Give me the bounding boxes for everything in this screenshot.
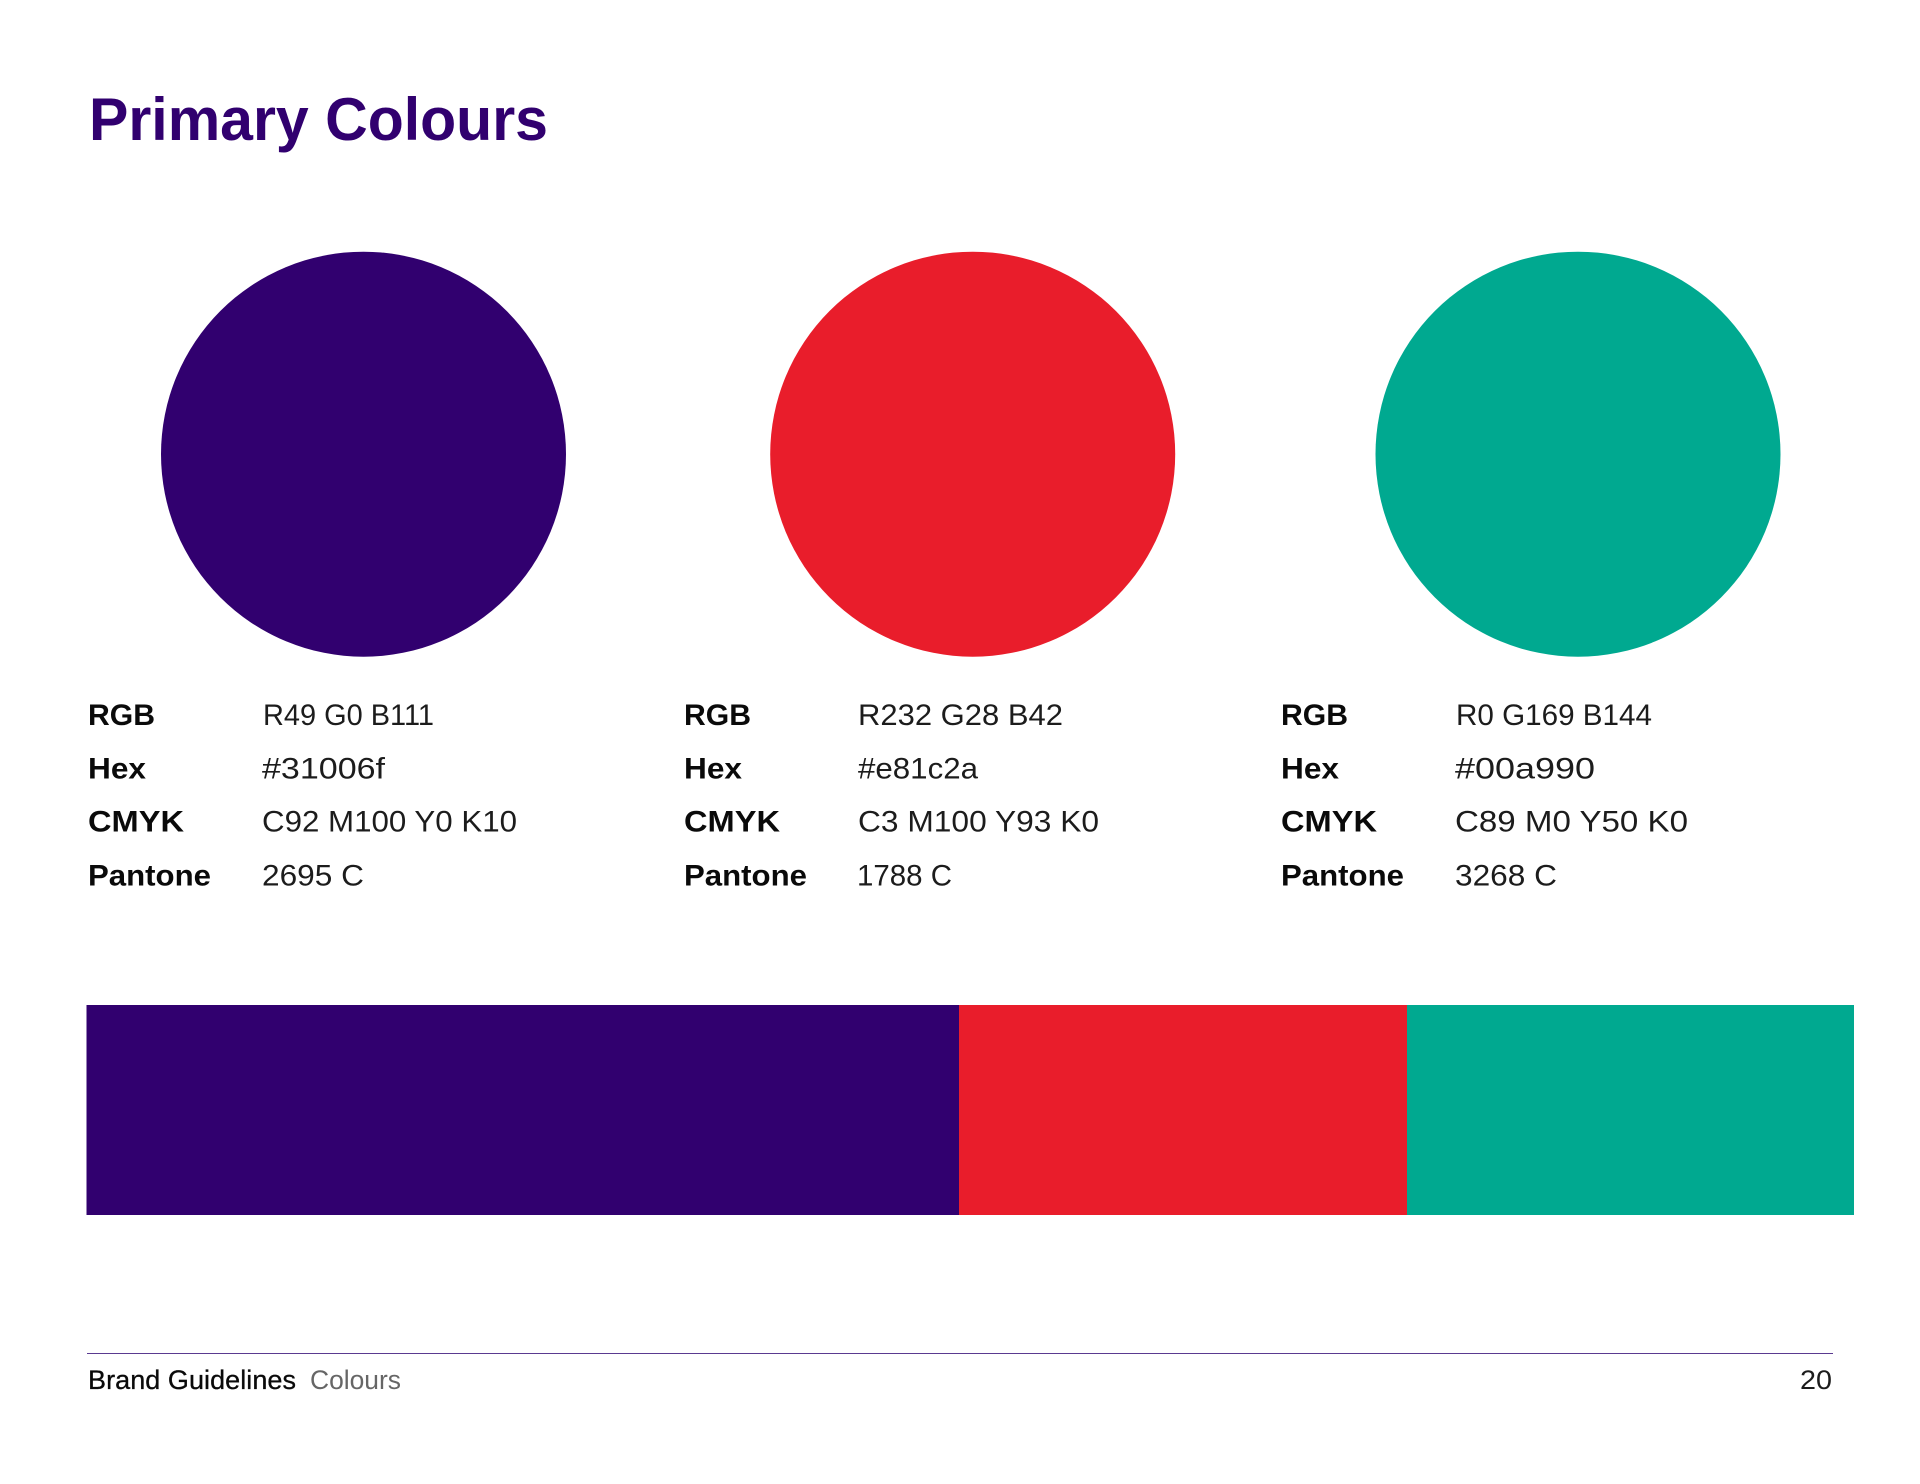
colour spec: red: Hex xyxy=(684,752,742,786)
colour spec: red: #e81c2a xyxy=(858,752,978,786)
colour spec: teal: Hex xyxy=(1281,752,1339,786)
colour spec: purple: Hex xyxy=(88,752,146,786)
colour spec: purple: 2695 C xyxy=(262,860,364,892)
colour spec: red: RGB xyxy=(684,699,751,732)
colour spec: red: C3 M100 Y93 K0 xyxy=(858,806,1099,838)
footer: document title: Brand Guidelines xyxy=(88,1365,296,1395)
colour spec: red: R232 G28 B42 xyxy=(858,699,1063,732)
colour spec: red: Pantone xyxy=(684,860,807,892)
title: Primary Colours xyxy=(89,86,548,153)
colour spec: purple: R49 G0 B111 xyxy=(263,699,434,732)
colour spec: purple: Pantone xyxy=(88,860,211,892)
footer: section name: Colours xyxy=(310,1365,401,1395)
colour spec: teal xyxy=(1281,699,1688,892)
circle: teal swatch xyxy=(1376,252,1780,657)
proportion bar xyxy=(86,1005,1854,1215)
colour spec: red: CMYK xyxy=(684,806,780,838)
colour spec: teal: 3268 C xyxy=(1455,860,1557,892)
colour spec: teal: R0 G169 B144 xyxy=(1456,699,1652,732)
colour spec: purple: RGB xyxy=(88,699,155,732)
colour spec: teal: CMYK xyxy=(1281,806,1377,838)
colour spec: purple: #31006f xyxy=(262,752,386,786)
footer rule xyxy=(87,1353,1833,1354)
colour spec: red: 1788 C xyxy=(857,860,952,892)
circle: purple swatch xyxy=(161,252,566,657)
colour spec: teal: RGB xyxy=(1281,699,1348,732)
colour spec: teal: Pantone xyxy=(1281,860,1404,892)
colour spec: purple xyxy=(88,699,517,892)
colour spec: teal: C89 M0 Y50 K0 xyxy=(1455,806,1688,838)
footer: page number: 20 xyxy=(1800,1365,1832,1395)
colour spec: teal: #00a990 xyxy=(1455,752,1595,786)
colour spec: purple: CMYK xyxy=(88,806,184,838)
colour spec: red xyxy=(684,699,1099,892)
colour spec: purple: C92 M100 Y0 K10 xyxy=(262,806,517,838)
circle: red swatch xyxy=(770,252,1175,657)
